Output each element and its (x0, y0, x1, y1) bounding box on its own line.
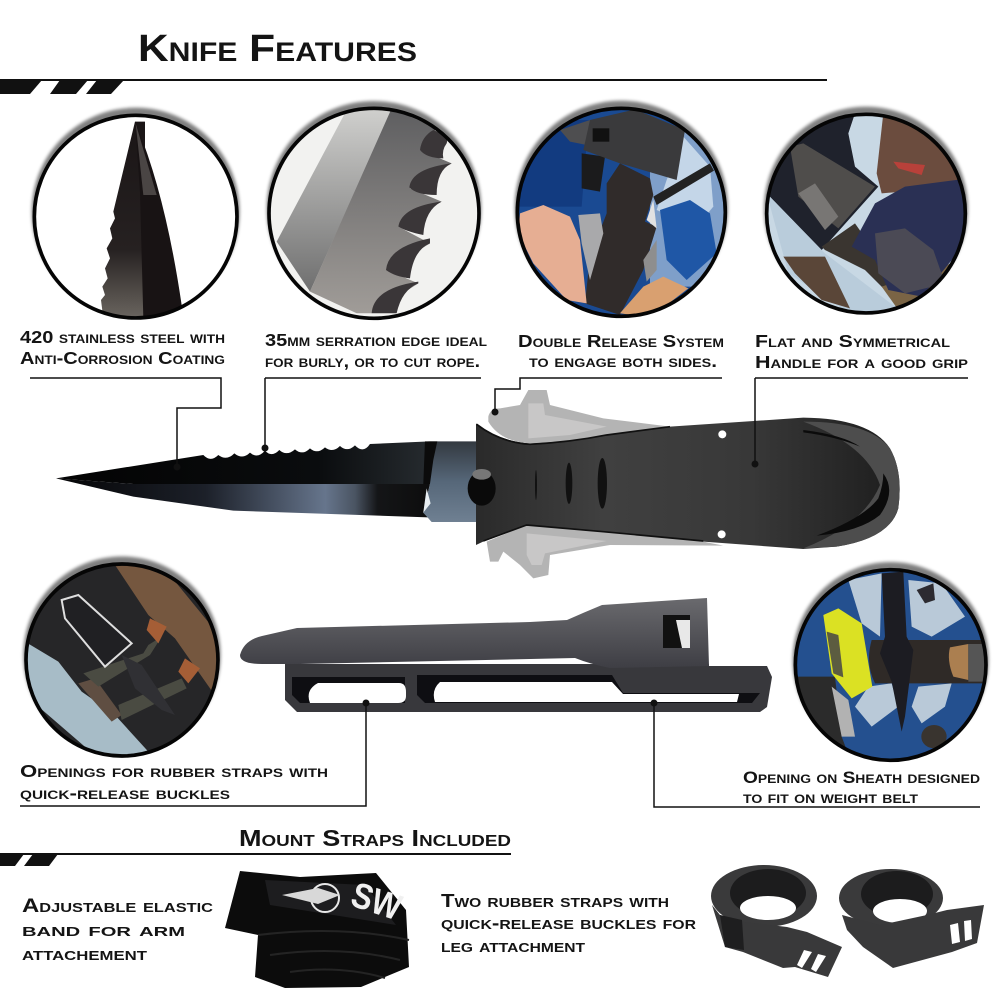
caption: steel (20, 327, 225, 368)
sheath upper shell (240, 598, 709, 668)
leader lines knife (30, 378, 968, 470)
knife blade lower bevel (56, 478, 430, 517)
elastic band: SW (347, 874, 407, 928)
caption: handle: Flat and Symmetrical (755, 331, 950, 351)
caption: serration: for burly, or to cut rope. (265, 351, 480, 371)
subtitle: Mount Straps Included (239, 825, 511, 851)
caption: rubber straps: quick-release buckles for (441, 912, 697, 933)
caption: rubber straps: Two rubber straps with (441, 890, 669, 911)
subtitle rule (0, 853, 511, 866)
title rule with stripes (0, 79, 827, 94)
caption: release: Double Release System (518, 331, 724, 351)
caption: steel: Anti-Corrosion Coating (20, 348, 225, 368)
knife guard bottom (487, 525, 723, 578)
leader lines sheath (20, 700, 980, 807)
knife ricasso (423, 441, 477, 522)
knife guard top (488, 390, 670, 443)
caption: belt opening (743, 769, 980, 807)
caption: straps opening: Openings for rubber straps with (20, 761, 328, 781)
caption: straps opening (20, 761, 328, 803)
elastic band (225, 871, 409, 988)
sheath (240, 598, 772, 712)
knife handle (476, 418, 900, 549)
caption: arm band: band for arm (22, 920, 185, 941)
caption: rubber straps (441, 890, 697, 956)
caption: release (518, 331, 724, 371)
rubber strap left (711, 865, 842, 977)
knife blade upper (56, 441, 430, 484)
caption: rubber straps: leg attachment (441, 935, 585, 956)
caption: belt opening: to fit on weight belt (743, 789, 919, 807)
rubber strap right (839, 869, 984, 968)
photo: blade tip (32, 108, 240, 318)
sheath lower frame (285, 664, 772, 712)
photo: strapped to leg (23, 556, 222, 758)
photo: glove on handle (764, 107, 968, 317)
caption: belt opening: Opening on Sheath designed (743, 769, 980, 787)
caption: handle (755, 331, 968, 372)
caption: straps opening: quick-release buckles (20, 783, 230, 803)
photo: weight belt (793, 562, 989, 763)
caption: steel: 420 stainless steel with (20, 327, 225, 347)
title: Knife Features (138, 28, 417, 70)
caption: serration: 35mm serration edge ideal (265, 330, 487, 350)
caption: arm band: Adjustable elastic (22, 896, 214, 917)
caption: arm band (22, 896, 214, 965)
caption: arm band: attachement (22, 944, 147, 965)
caption: serration (265, 330, 487, 371)
caption: handle: Handle for a good grip (755, 352, 968, 372)
photo: double release (515, 101, 730, 317)
knife (56, 390, 900, 578)
caption: release: to engage both sides. (529, 351, 717, 371)
photo: serration (267, 101, 481, 318)
